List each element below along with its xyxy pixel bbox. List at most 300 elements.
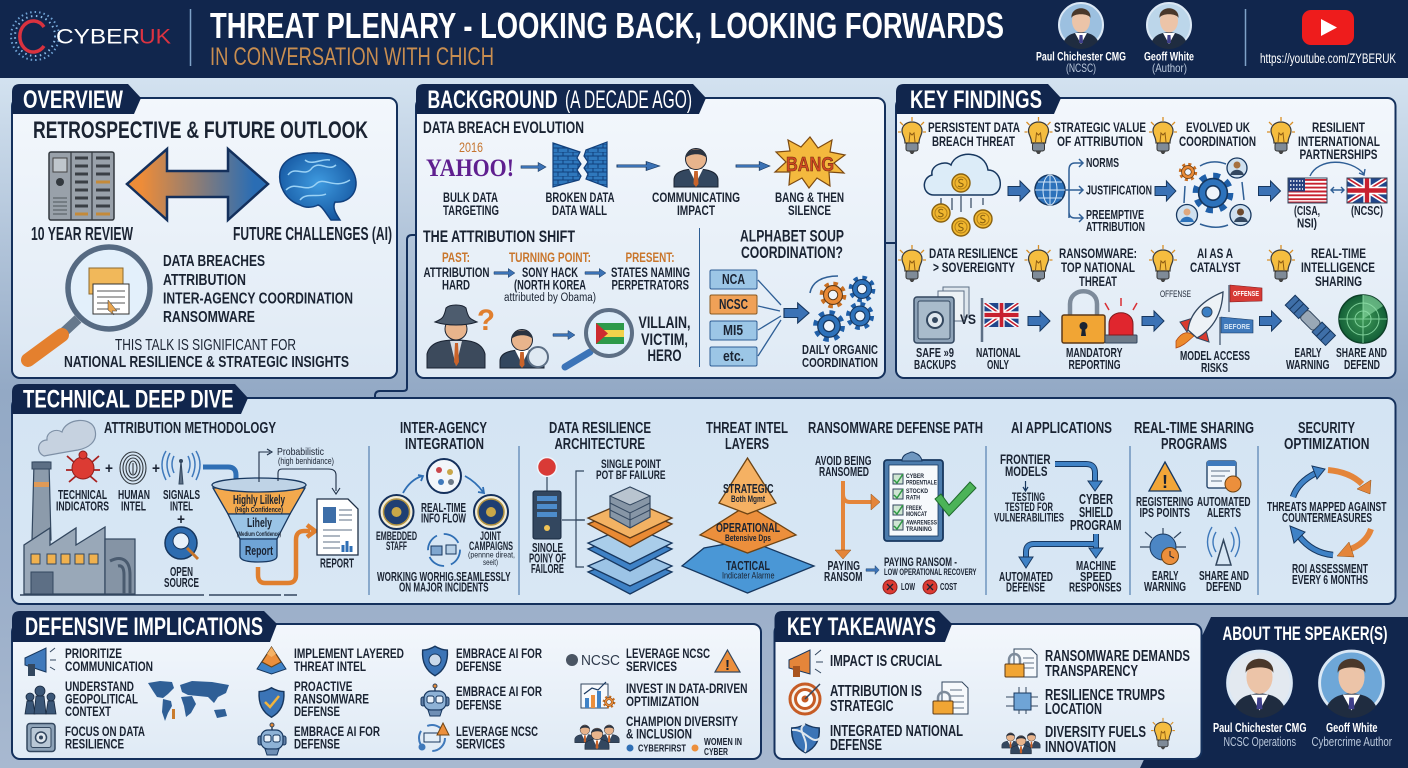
- finding captions row 2: MODEL ACCESS: [1180, 348, 1250, 363]
- intel source labels: TECHNICAL: [58, 488, 107, 502]
- item: diversity and inclusion: & INCLUSION: [626, 726, 692, 742]
- icon: cloud with coins: [924, 154, 1000, 236]
- item: layered threat intel: [294, 646, 404, 674]
- finding headings row 2: SHARING: [1315, 274, 1362, 289]
- icon: robot: [258, 723, 286, 755]
- item: prioritize communication: PRIORITIZE: [65, 646, 122, 661]
- agency boxes: NCSC: [719, 297, 748, 313]
- icon: layered storage stack: [588, 487, 672, 594]
- icon: layered pyramid: [257, 647, 286, 674]
- item: diversity and inclusion: WOMEN IN: [704, 736, 742, 748]
- inter-agency diagram: seeit): [483, 557, 498, 567]
- finding headings row 1: BREACH THREAT: [932, 134, 1016, 149]
- attribution timeline: STATES NAMING: [611, 265, 690, 280]
- heading: background: [416, 84, 706, 114]
- logo: Yahoo: YAHOO!: [426, 155, 514, 182]
- icon: document with padlock: [933, 682, 968, 714]
- finding captions row 2: REPORTING: [1068, 357, 1120, 372]
- item: embrace AI: EMBRACE AI FOR: [294, 724, 380, 739]
- ransomware branching path: [815, 454, 880, 584]
- icon: coordination gears: COORDINATION: [802, 355, 878, 370]
- real-time sharing heading: REAL-TIME SHARING: [1134, 420, 1254, 437]
- finding captions row 2: NATIONAL: [976, 345, 1021, 360]
- icon: target: [790, 684, 820, 714]
- portrait: Geoff White: [1320, 651, 1383, 718]
- security optimization heading: [1284, 420, 1370, 453]
- arrow: [1142, 311, 1164, 331]
- arrow: [617, 162, 660, 170]
- AI flow diagram: CYBER: [1079, 491, 1113, 508]
- speaker thumbnails: (NCSC): [1066, 61, 1096, 75]
- icon: confidence funnel: [203, 467, 306, 562]
- inter-agency heading: [400, 420, 487, 453]
- AI flow diagram: RESPONSES: [1069, 580, 1122, 594]
- icon: factory: [20, 462, 297, 595]
- icon: diverse team: [575, 725, 619, 749]
- ransom consequences: [883, 557, 976, 594]
- finding captions row 2: SAFE »9: [916, 345, 954, 360]
- threat intel pyramid: STRATEGIC: [723, 481, 774, 496]
- arrow: [553, 330, 575, 340]
- icon: robot: [421, 684, 449, 716]
- takeaway: integrated defense: INTEGRATED NATIONAL: [830, 723, 963, 740]
- sharing program icons: AUTOMATED: [1197, 495, 1250, 509]
- probability callout: (high benhidance): [278, 456, 334, 467]
- item: data resilience: [65, 724, 145, 752]
- heading: technical deep dive: TECHNICAL DEEP DIVE: [23, 386, 234, 414]
- finding headings row 1: OF ATTRIBUTION: [1057, 134, 1143, 149]
- attribution timeline: PRESENT:: [626, 250, 674, 265]
- speaker thumbnails: Paul Chichester CMG: [1036, 50, 1126, 64]
- item: data resilience: FOCUS ON DATA: [65, 724, 145, 739]
- icon: padlock and siren: [1062, 291, 1137, 343]
- finding headings row 2: AI AS A: [1197, 246, 1233, 261]
- icon: US and UK partnership: [1288, 162, 1387, 230]
- finding bulbs row 1: [898, 117, 1295, 154]
- intel source labels: INTEL: [121, 500, 146, 514]
- label: versus: VS: [960, 311, 976, 327]
- item: diversity and inclusion: CYBERFIRST: [638, 742, 686, 754]
- icon: checklist clipboard: FREEK: [906, 505, 922, 512]
- label: villain victim hero: [638, 314, 690, 365]
- icon: report document: [317, 499, 358, 570]
- icon: bang burst: BANG: [786, 154, 834, 176]
- security optimization heading: OPTIMIZATION: [1284, 436, 1370, 453]
- attribution methodology heading: ATTRIBUTION METHODOLOGY: [104, 420, 276, 437]
- ransom consequences: LOW: [901, 581, 915, 593]
- intel source labels: +: [177, 511, 185, 528]
- sharing program icons: WARNING: [1144, 580, 1186, 594]
- label: future challenges: FUTURE CHALLENGES (AI): [233, 224, 392, 244]
- icon: single point server: [529, 458, 585, 576]
- ransomware branching path: RANSOM: [824, 570, 862, 584]
- label: villain victim hero: HERO: [648, 347, 682, 365]
- attribution value branches: NORMS: [1086, 155, 1119, 170]
- security optimization heading: SECURITY: [1298, 420, 1355, 437]
- icon: single point server: SINOLE: [532, 541, 563, 555]
- takeaway: resilience: RESILIENCE TRUMPS: [1045, 687, 1165, 704]
- intel source labels: HUMAN: [118, 488, 150, 502]
- icon: brain: [280, 153, 356, 220]
- icon: megaphone: [789, 650, 823, 677]
- breach evolution labels: BROKEN DATA: [546, 190, 615, 205]
- label: plus: +: [105, 460, 113, 477]
- AI flow diagram: MACHINE: [1076, 559, 1116, 573]
- heading: background: (A DECADE AGO): [565, 86, 692, 114]
- item: layered threat intel: THREAT INTEL: [294, 659, 366, 674]
- speaker thumbnails: Geoff White: [1144, 50, 1194, 64]
- sharing program icons: IPS POINTS: [1140, 506, 1190, 520]
- year label: 2016: [459, 139, 483, 155]
- AI flow diagram: SPEED: [1080, 570, 1112, 584]
- sharing program icons: SHARE AND: [1199, 569, 1249, 583]
- finding captions row 2: MANDATORY: [1066, 345, 1123, 360]
- takeaway: diversity: DIVERSITY FUELS: [1045, 724, 1146, 741]
- finding headings row 2: [929, 246, 1375, 289]
- orange return arrow: [258, 525, 315, 583]
- AI flow diagram: VULNERABILITIES: [994, 510, 1064, 524]
- ransomware branching path: AVOID BEING: [815, 454, 872, 468]
- data resilience heading: [549, 420, 651, 453]
- heading: key takeaways: [774, 611, 952, 642]
- significance statement: THIS TALK IS SIGNIFICANT FOR: [115, 337, 296, 354]
- speaker: Paul Chichester: Paul Chichester CMG: [1213, 720, 1306, 735]
- attribution timeline: (NORTH KOREA: [514, 278, 586, 292]
- item: embrace AI: EMBRACE AI FOR: [456, 646, 542, 661]
- threat intel pyramid: Betensive Dps: [725, 533, 771, 543]
- ransomware branching path: PAYING: [828, 559, 860, 573]
- takeaway: diversity: [1045, 724, 1146, 756]
- icon: smoke cloud: [39, 420, 96, 456]
- attribution timeline: [424, 250, 690, 304]
- optimization cycle: ROI ASSESSMENT: [1292, 562, 1368, 576]
- icon: megaphone: [25, 648, 56, 676]
- icon: broken data wall: [553, 142, 607, 187]
- icon: satellite: [1285, 295, 1335, 345]
- attribution timeline: TURNING POINT:: [509, 250, 591, 265]
- icon: confidence funnel: Highly Lilkely: [233, 492, 285, 507]
- icon: coordination cycle: [1176, 158, 1251, 227]
- takeaway: impact: IMPACT IS CRUCIAL: [830, 653, 942, 670]
- icon: malware bug: [66, 451, 100, 482]
- icon: YouTube: [1302, 10, 1354, 45]
- takeaway: transparency: RANSOMWARE DEMANDS: [1045, 648, 1190, 665]
- significance statement: [64, 337, 349, 371]
- item: geopolitical context: UNDERSTAND: [65, 679, 134, 694]
- icon: report document: REPORT: [320, 556, 354, 570]
- AI flow diagram: AUTOMATED: [999, 570, 1053, 584]
- finding captions row 2: [914, 345, 1387, 375]
- probability callout: [259, 446, 340, 494]
- sharing program icons: EARLY: [1152, 569, 1179, 583]
- finding headings row 2: TOP NATIONAL: [1061, 260, 1135, 275]
- finding headings row 2: INTELLIGENCE: [1301, 260, 1375, 275]
- item: proactive ransomware defense: PROACTIVE: [294, 679, 352, 694]
- icon: checklist clipboard: TRAINING: [906, 526, 932, 533]
- icon: checklist clipboard: MONCAT: [906, 511, 927, 518]
- icon: coordination gears: DAILY ORGANIC: [802, 342, 878, 357]
- finding headings row 2: THREAT: [1079, 274, 1118, 289]
- attribution value branches: ATTRIBUTION: [1086, 219, 1145, 234]
- panel: defensive implications: [12, 611, 761, 759]
- icon: checklist clipboard: RATH: [906, 494, 920, 502]
- sharing program icons: [1136, 461, 1250, 594]
- item: leverage NCSC services: LEVERAGE NCSC: [626, 646, 710, 661]
- icon: confidence funnel: Report: [245, 543, 273, 558]
- item: leverage NCSC: SERVICES: [456, 736, 505, 752]
- icon: checklist clipboard: [884, 452, 976, 541]
- probability callout: Probabilistic: [277, 446, 324, 458]
- finding headings row 2: CATALYST: [1190, 260, 1241, 275]
- finding headings row 2: REAL-TIME: [1311, 246, 1366, 261]
- icon: single point server: FAILORE: [531, 562, 564, 576]
- icon: confidence funnel: Lihely: [247, 515, 273, 530]
- overview topics: DATA BREACHES: [163, 253, 265, 270]
- logo: NCSC: NCSC: [581, 652, 620, 669]
- panel: background: [416, 84, 885, 378]
- finding captions row 2: EARLY: [1294, 345, 1322, 360]
- panel: key takeaways: [774, 611, 1202, 759]
- item: geopolitical context: CONTEXT: [65, 704, 112, 719]
- intel source labels: [56, 488, 200, 590]
- icon: shield seal: [423, 646, 447, 676]
- attribution timeline: PERPETRATORS: [612, 278, 689, 292]
- overview topics: [163, 253, 353, 326]
- significance statement: NATIONAL RESILIENCE & STRATEGIC INSIGHTS: [64, 354, 349, 371]
- inter-agency diagram: ON MAJOR INCIDENTS: [399, 580, 488, 594]
- item: embrace AI: DEFENSE: [294, 736, 340, 752]
- sharing program icons: !: [1162, 472, 1168, 492]
- item: proactive ransomware defense: RANSOMWARE: [294, 692, 369, 706]
- ransom consequences: PAYING RANSOM -: [884, 557, 957, 569]
- attribution timeline: ATTRIBUTION: [424, 265, 490, 280]
- arrow: [736, 162, 770, 170]
- icon: radar: [1339, 295, 1387, 343]
- optimization cycle: EVERY 6 MONTHS: [1292, 573, 1368, 587]
- threat intel pyramid: Indicater Alarme: [722, 570, 774, 580]
- item: leverage NCSC: [456, 724, 538, 752]
- arrow: [1028, 311, 1050, 331]
- finding headings row 1: PERSISTENT DATA: [928, 120, 1020, 135]
- icon: US and UK partnership: (NCSC): [1351, 203, 1383, 218]
- AI flow diagram: DEFENSE: [1006, 580, 1045, 594]
- breach evolution labels: BANG & THEN: [775, 190, 844, 205]
- finding captions row 2: WARNING: [1286, 357, 1330, 372]
- item: diversity and inclusion: [626, 714, 742, 758]
- icon: magnifier with flag: [565, 310, 632, 367]
- finding headings row 1: EVOLVED UK: [1186, 120, 1250, 135]
- inter-agency diagram: JOINT: [480, 531, 501, 543]
- finding headings row 2: RANSOMWARE:: [1059, 246, 1137, 261]
- icon: safe with backups: [914, 287, 969, 343]
- heading: overview: OVERVIEW: [23, 86, 123, 114]
- speaker thumbnails: [1036, 3, 1194, 75]
- finding captions row 2: DEFEND: [1344, 357, 1380, 372]
- icon: locked report: [1005, 649, 1037, 677]
- ransom consequences: LOW OPERATIONAL RECOVERY: [884, 567, 976, 577]
- icon: server rack: [49, 152, 114, 220]
- threat intel heading: [706, 420, 788, 453]
- takeaway: resilience: [1045, 687, 1165, 718]
- real-time sharing heading: [1134, 420, 1254, 453]
- alphabet soup heading: COORDINATION?: [741, 243, 843, 262]
- label: single point of failure: SINGLE POINT: [601, 457, 661, 471]
- attribution timeline: PAST:: [442, 250, 470, 265]
- optimization cycle: [1267, 466, 1387, 587]
- item: data resilience: RESILIENCE: [65, 736, 124, 752]
- attribution timeline: HARD: [442, 278, 470, 292]
- icon: warning: [715, 650, 740, 674]
- icon: shield check: [259, 688, 284, 717]
- icon: checklist clipboard: PRDENTIALE: [906, 480, 937, 486]
- item: geopolitical context: GEOPOLITICAL: [65, 692, 138, 706]
- icon: US and UK partnership: NSI): [1297, 216, 1317, 230]
- arrow: [1260, 311, 1282, 331]
- label: single point of failure: [576, 457, 666, 567]
- icon: globe: [1035, 175, 1065, 205]
- icon: integrated shield: [792, 724, 820, 753]
- inter-agency diagram: CAMPAIGNS: [469, 541, 513, 553]
- icon: fingerprint: [120, 452, 146, 484]
- inter-agency diagram: STAFF: [386, 541, 407, 553]
- icon: safe: [27, 724, 55, 752]
- icon: world map: [148, 681, 229, 721]
- AI flow diagram: MODELS: [1005, 463, 1048, 479]
- AI flow diagram: TESTED FOR: [1005, 500, 1053, 514]
- icon: UK flag on pole: [982, 298, 1018, 342]
- logo: NCSC: [566, 652, 620, 669]
- inter-agency diagram: REAL-TIME: [421, 501, 466, 515]
- sharing program icons: ALERTS: [1207, 506, 1241, 520]
- sharing program icons: REGISTERING: [1136, 495, 1194, 509]
- AI flow diagram: [994, 451, 1122, 594]
- breach evolution labels: IMPACT: [677, 203, 716, 218]
- arrow: [784, 303, 809, 323]
- item: leverage NCSC services: SERVICES: [626, 659, 677, 674]
- takeaway: transparency: [1045, 648, 1190, 680]
- takeaway: integrated defense: [830, 723, 963, 754]
- heading: defensive implications: [12, 611, 277, 642]
- icon: single point server: POINY OF: [529, 552, 566, 566]
- attribution shift heading: THE ATTRIBUTION SHIFT: [423, 228, 575, 246]
- intel source labels: OPEN: [170, 565, 193, 579]
- item: data-driven optimization: INVEST IN DATA-DRIVEN: [626, 681, 748, 696]
- threat intel heading: LAYERS: [725, 436, 769, 453]
- AI flow diagram: TESTING: [1012, 490, 1045, 504]
- icon: rocket with flags: BEFORE: [1224, 324, 1250, 331]
- arrow: [1008, 181, 1030, 201]
- item: diversity and inclusion: CYBER: [704, 746, 728, 758]
- inter-agency diagram: [376, 459, 515, 594]
- breach evolution labels: BULK DATA: [443, 190, 498, 205]
- title: THREAT PLENARY - LOOKING BACK, LOOKING FORWARDS: [210, 5, 1004, 46]
- AI flow diagram: FRONTIER: [1000, 451, 1050, 467]
- data breach evolution heading: DATA BREACH EVOLUTION: [423, 119, 584, 137]
- portrait: Paul Chichester: [1228, 651, 1291, 718]
- double arrow: past to future: [127, 149, 268, 220]
- icon: warning: !: [725, 657, 730, 674]
- label: single point of failure: POT BF FAILURE: [596, 468, 666, 482]
- takeaway: transparency: TRANSPARENCY: [1045, 663, 1138, 680]
- icon: checklist clipboard: STOCKD: [906, 488, 928, 495]
- finding headings row 1: STRATEGIC VALUE: [1054, 120, 1146, 135]
- arrow: [1155, 181, 1176, 201]
- threat intel pyramid: [682, 458, 814, 593]
- breach evolution labels: SILENCE: [788, 203, 831, 218]
- heading: background: BACKGROUND: [428, 86, 558, 114]
- icon: open source globe: [165, 527, 198, 559]
- inter-agency heading: INTER-AGENCY: [400, 420, 487, 437]
- takeaway: resilience: LOCATION: [1045, 701, 1102, 718]
- icon: spy with question mark: [427, 304, 495, 368]
- takeaway: diversity: INNOVATION: [1045, 739, 1116, 756]
- finding captions row 2: ONLY: [987, 357, 1009, 372]
- takeaway: attribution: ATTRIBUTION IS: [830, 683, 922, 700]
- icon: spy with question mark: ?: [477, 304, 495, 337]
- alphabet soup heading: [740, 226, 844, 262]
- takeaway: attribution: [830, 683, 922, 715]
- heading: key takeaways: KEY TAKEAWAYS: [787, 613, 936, 641]
- threat intel pyramid: Both Mgmt: [731, 494, 765, 504]
- icon: confidence funnel: (Medium Confidence): [237, 531, 281, 538]
- data resilience heading: ARCHITECTURE: [554, 436, 645, 453]
- agency boxes: MI5: [723, 323, 743, 339]
- data resilience heading: DATA RESILIENCE: [549, 420, 651, 437]
- heading: defensive implications: DEFENSIVE IMPLICATIONS: [25, 613, 263, 641]
- icon: rocket with flags: OFFENSE: [1160, 289, 1191, 300]
- icon: confidence funnel: (High Confidence): [235, 507, 283, 514]
- icon: analyst: [500, 330, 548, 368]
- finding headings row 1: INTERNATIONAL: [1298, 134, 1380, 149]
- label: villain victim hero: VILLAIN,: [638, 314, 690, 332]
- CYBERUK logo: [11, 12, 171, 60]
- takeaway: attribution: STRATEGIC: [830, 698, 894, 715]
- item: embrace AI: DEFENSE: [456, 698, 502, 712]
- breach evolution labels: TARGETING: [443, 203, 499, 218]
- speaker: Geoff White: [1312, 720, 1392, 749]
- item: layered threat intel: IMPLEMENT LAYERED: [294, 646, 404, 661]
- finding headings row 2: DATA RESILIENCE: [929, 246, 1018, 261]
- threat intel pyramid: TACTICAL: [726, 558, 770, 573]
- finding headings row 1: [928, 120, 1380, 162]
- icon: idea bulb: [1151, 718, 1175, 749]
- CYBERUK logo: CYBER: [56, 26, 140, 48]
- icon: rocket with flags: [1160, 285, 1262, 348]
- panel: about the speakers: [1140, 617, 1408, 768]
- sharing program icons: DEFEND: [1206, 580, 1242, 594]
- AI applications heading: AI APPLICATIONS: [1011, 420, 1112, 437]
- overview subtitle: RETROSPECTIVE & FUTURE OUTLOOK: [33, 117, 368, 144]
- icon: coordination gears: [802, 276, 878, 370]
- icon: rocket with flags: OFFENSE: [1233, 291, 1259, 298]
- item: proactive ransomware defense: DEFENSE: [294, 704, 340, 719]
- label: villain victim hero: VICTIM,: [641, 331, 688, 349]
- item: diversity and inclusion: CHAMPION DIVERSITY: [626, 714, 738, 729]
- attribution timeline: attributed by Obama): [504, 292, 596, 304]
- finding headings row 1: RESILIENT: [1312, 120, 1366, 135]
- finding headings row 1: COORDINATION: [1179, 134, 1256, 149]
- icon: magnifier over document: [28, 247, 150, 360]
- icon: chess pieces: [25, 686, 56, 714]
- item: prioritize communication: [65, 646, 153, 674]
- icon: services badge: [418, 723, 449, 751]
- ransom consequences: COST: [940, 581, 957, 593]
- item: leverage NCSC: LEVERAGE NCSC: [456, 724, 538, 739]
- speaker: Paul Chichester: [1213, 720, 1306, 749]
- icon: data chart: [581, 682, 614, 708]
- threat intel pyramid: OPERATIONAL: [716, 520, 780, 535]
- intel source labels: INTEL: [170, 500, 193, 514]
